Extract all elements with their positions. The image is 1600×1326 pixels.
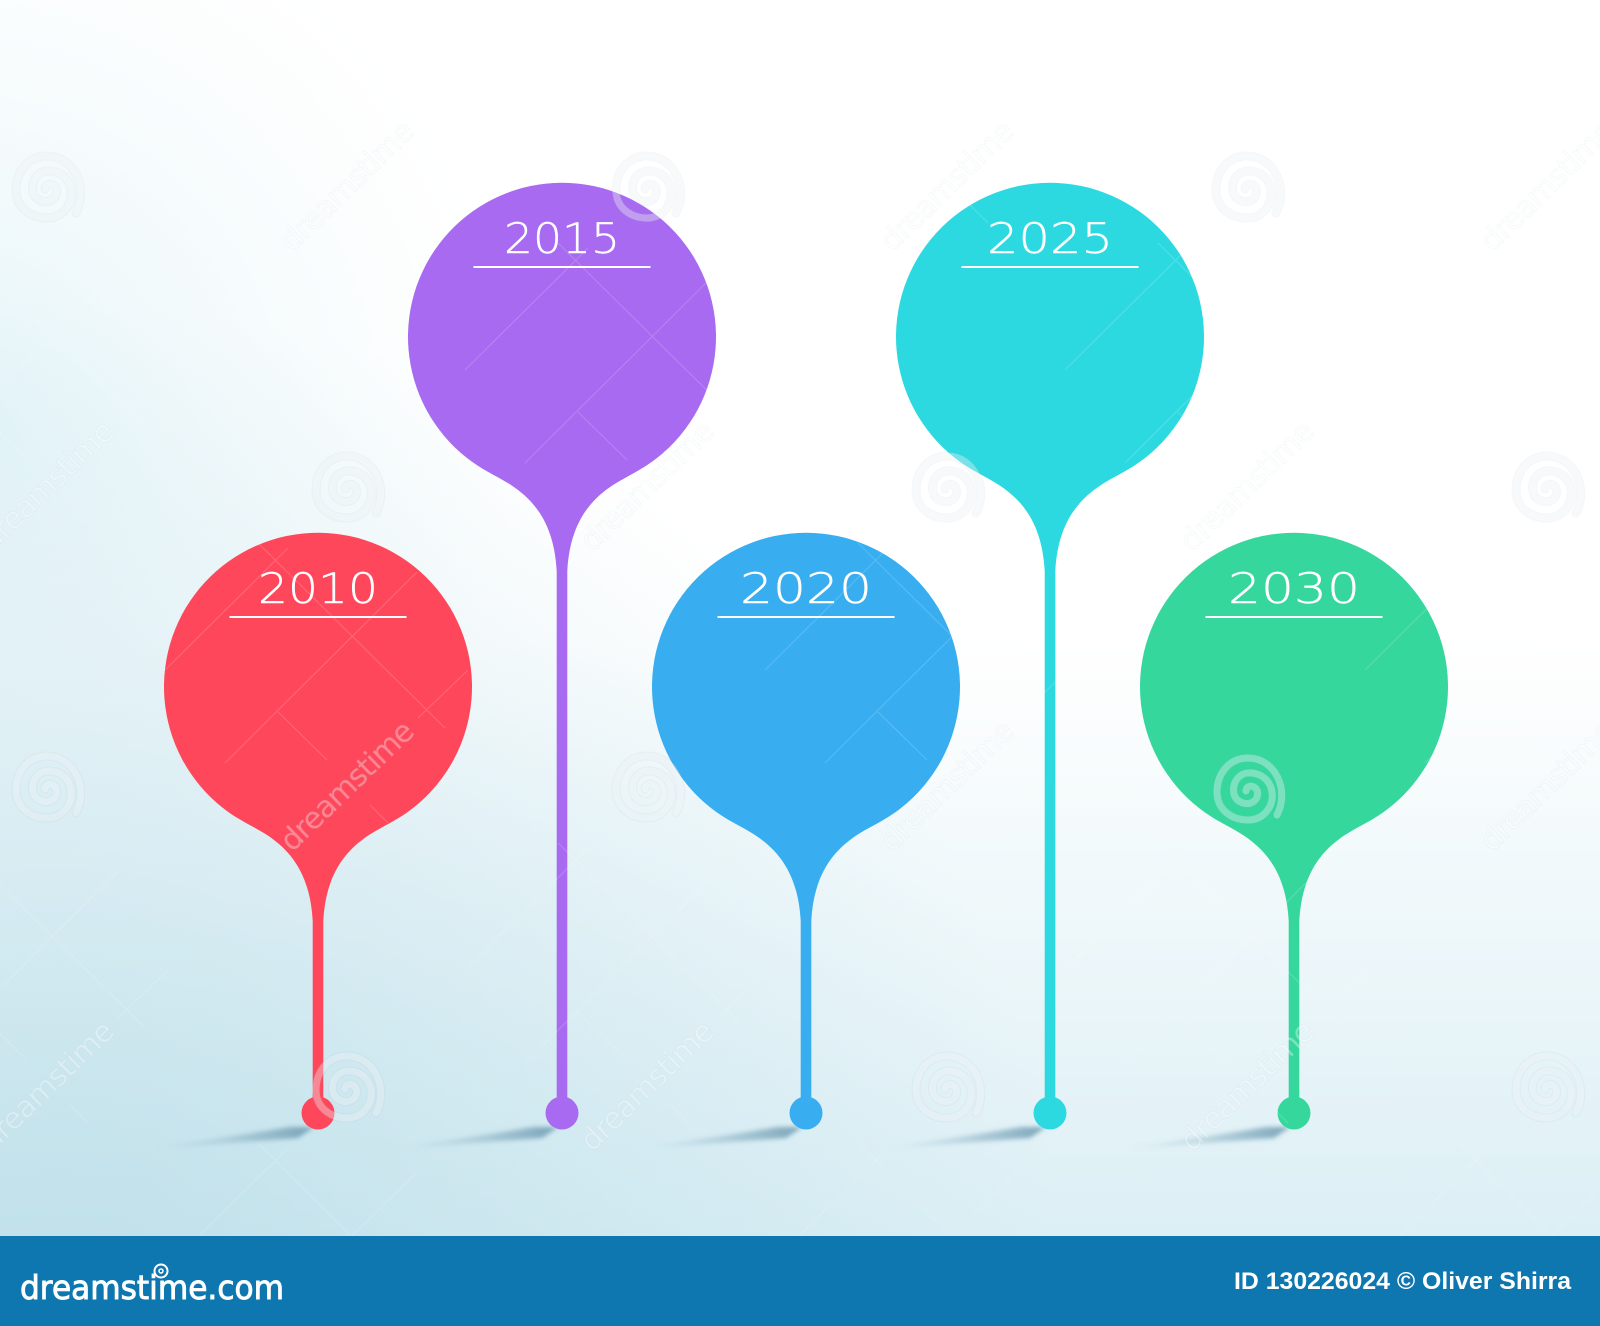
pin: 2010 [164,533,472,1130]
watermark text: dreamstime [573,414,721,558]
watermark text: dreamstime [273,714,421,858]
pin: 2015: 2015 [504,214,620,263]
pin: 2015 [408,183,716,1129]
watermark text: dreamstime [873,714,1021,858]
footer logo: dreamstime.com [20,1268,284,1307]
watermark text [0,114,1600,1158]
watermark text: dreamstime [273,114,421,258]
ground shadows [150,1127,1290,1149]
pin: 2030 [1140,533,1448,1130]
pin: 2025: 2025 [987,214,1113,263]
footer credit: ID 130226024 © Oliver Shirra [1234,1268,1572,1295]
watermark spirals [16,156,1581,1118]
pin: 2025 [896,183,1204,1129]
pin: 2010: 2010 [258,564,378,613]
pin: 2030: 2030 [1228,564,1360,613]
watermark text: dreamstime [1173,1014,1321,1158]
watermark text: dreamstime [573,1014,721,1158]
footer bar [0,1236,1600,1326]
pin: 2020 [652,533,960,1130]
pin: 2020: 2020 [740,564,872,613]
watermark text: dreamstime [1173,414,1321,558]
watermark text: dreamstime [873,114,1021,258]
